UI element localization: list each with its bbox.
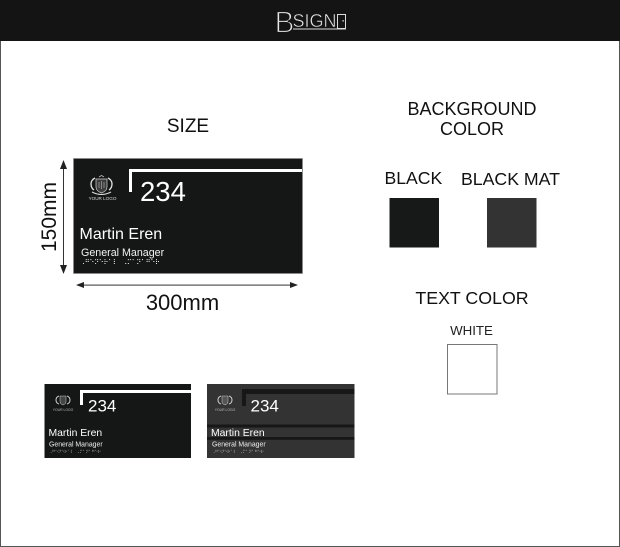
heading: size: SIZE [167, 116, 209, 137]
small sign: black mat [207, 384, 354, 458]
room number: 234 [140, 176, 186, 207]
name: Martin Eren [211, 428, 265, 439]
small sign: black [44, 384, 191, 458]
braille: ⠠⠛⠑⠝⠑⠗⠁⠇⠀⠠⠍⠁⠝⠁⠛⠑⠗ [212, 449, 264, 454]
room number bracket [80, 390, 191, 405]
recessed strip lower [207, 437, 354, 440]
swatch: white [448, 344, 497, 394]
heading: background color: BACKGROUND [407, 99, 537, 119]
braille: ⠠⠛⠑⠝⠑⠗⠁⠇⠀⠠⠍⠁⠝⠁⠛⠑⠗ [80, 258, 160, 266]
recessed bracket [242, 389, 354, 406]
label: white: WHITE [450, 323, 493, 338]
icon: crest logo: YOUR LOGO [89, 196, 117, 201]
swatch: black mat [487, 198, 536, 248]
heading: background color: COLOR [440, 119, 504, 139]
label: 300mm: 300mm [146, 290, 219, 315]
heading: text color: TEXT COLOR [415, 288, 529, 308]
arrow: height dimension [60, 160, 67, 274]
icon: crest logo [89, 176, 117, 201]
icon: crest logo: YOUR LOGO [215, 408, 236, 412]
label: black: BLACK [384, 168, 442, 188]
braille: ⠠⠛⠑⠝⠑⠗⠁⠇⠀⠠⠍⠁⠝⠁⠛⠑⠗ [49, 449, 101, 454]
header bar with brand logo [0, 0, 620, 41]
brand logo: BSIGN: B [274, 4, 294, 40]
job title: General Manager [212, 442, 266, 449]
room number: 234 [88, 396, 116, 416]
large black sign [74, 158, 302, 274]
recessed strip upper [207, 424, 354, 428]
icon: crest logo [215, 396, 236, 412]
room number bracket [129, 169, 302, 192]
job title: General Manager [49, 442, 103, 449]
label: black mat: BLACK MAT [461, 169, 560, 189]
swatch: black [390, 198, 439, 248]
name: Martin Eren [48, 428, 102, 439]
icon: crest logo: YOUR LOGO [53, 408, 74, 412]
label: 150mm: 150mm [38, 182, 61, 252]
brand logo: BSIGN [274, 4, 346, 40]
heading: background color [407, 99, 537, 139]
name: Martin Eren [80, 226, 162, 243]
room number: 234 [250, 396, 279, 416]
job title: General Manager [81, 247, 165, 259]
arrow: width dimension [76, 282, 298, 288]
icon: crest logo [53, 396, 74, 412]
brand logo: BSIGN: SIGN [292, 11, 336, 31]
